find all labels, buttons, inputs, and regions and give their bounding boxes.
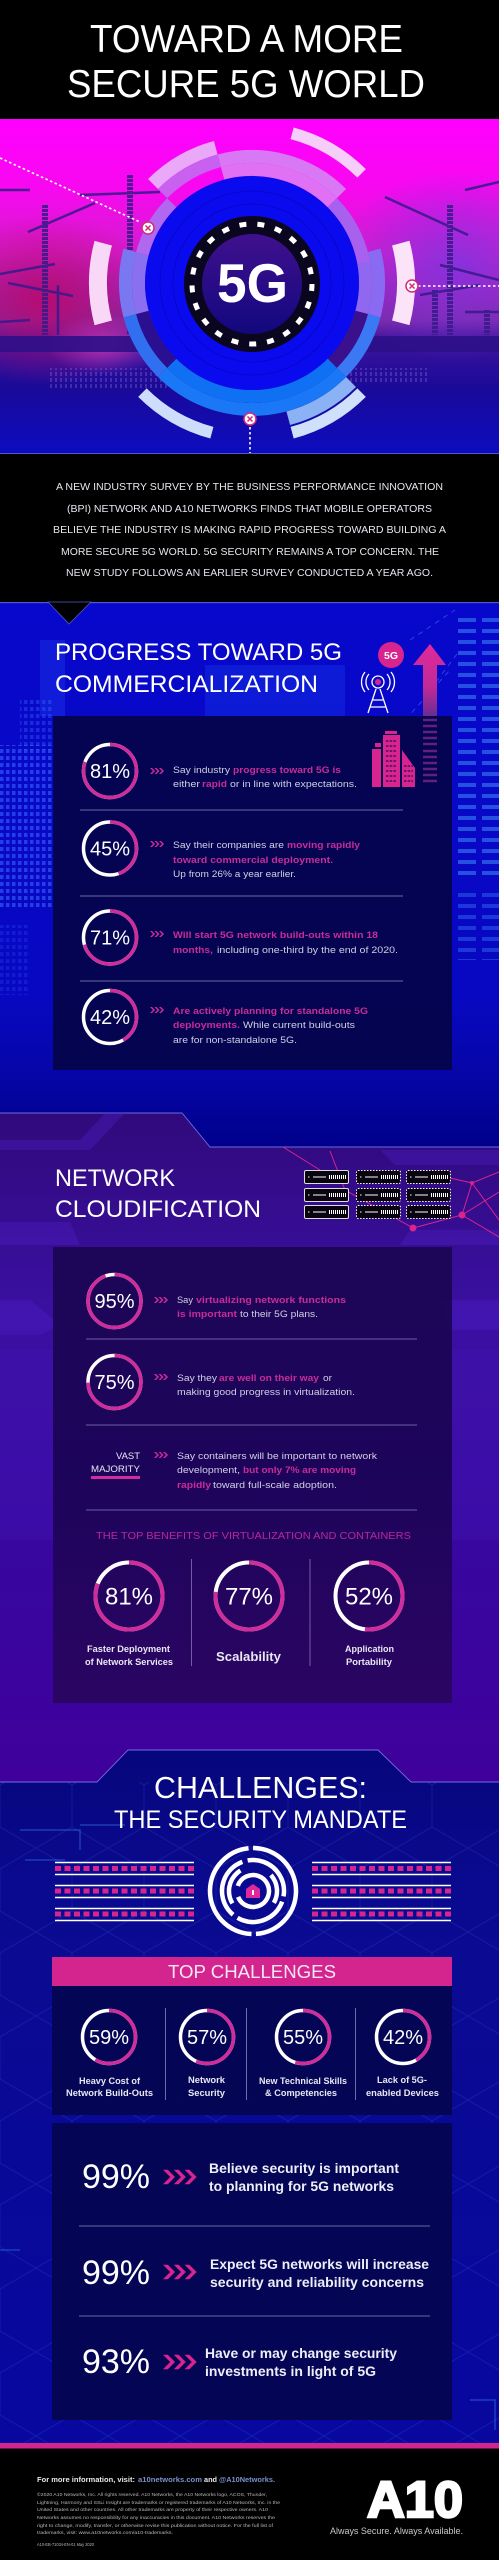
intro text band: BELIEVE THE INDUSTRY IS MAKING RAPID PROGRESS TOWARD BUILDING A: [53, 525, 446, 536]
stat row: 75%: 75%: [94, 1372, 135, 1394]
top challenges banner: TOP CHALLENGES: [168, 1961, 336, 1982]
benefit: 81% faster deployment: 81%: [105, 1584, 153, 1610]
hero panel: 5G construction scene: [0, 64, 499, 502]
stat row: 45%: [80, 810, 403, 880]
challenge: 42%: 42%: [383, 2027, 423, 2049]
legal text: right to change, modify, transfer, or otherwise revise this publication without notice. For the full list of: [37, 2523, 274, 2528]
title band: TOWARD A MORE: [90, 18, 403, 61]
tagline: Always Secure. Always Available.: [330, 2526, 463, 2537]
section heading: COMMERCIALIZATION: [55, 671, 318, 698]
stat row: 81%: [84, 744, 357, 798]
benefit: 52% application portability: Application: [345, 1644, 394, 1655]
benefits heading: THE TOP BENEFITS OF VIRTUALIZATION AND CONTAINERS: [96, 1530, 411, 1542]
stats panel: [53, 1247, 452, 1703]
challenge: 59%: Network Build-Outs: [66, 2088, 153, 2099]
icon: blocked node right: [406, 280, 418, 292]
stat: 99% increased concerns: security and reliability concerns: [210, 2275, 424, 2290]
stat: 99% security important: [82, 2158, 400, 2196]
stat row: 45%: moving rapidly: [287, 840, 361, 851]
intro text band: [0, 454, 499, 602]
stat: 99% increased concerns: 99%: [82, 2254, 150, 2292]
stat row: 81%: either: [173, 779, 201, 790]
title band: SECURE 5G WORLD: [67, 63, 425, 106]
stat row: 95%: virtualizing network functions: [196, 1295, 346, 1306]
legal text: ©2020 A10 Networks, Inc. All rights reserved. A10 Networks, the A10 Networks logo, ACOS, Thunder,: [37, 2491, 267, 2497]
section heading: [55, 1165, 261, 1223]
challenge: 55%: & Competencies: [265, 2088, 337, 2099]
hero dial: [33, 64, 471, 502]
challenge: 55%: New Technical Skills: [259, 2076, 347, 2087]
icon: blocked node bottom: [244, 413, 256, 425]
section heading: CLOUDIFICATION: [55, 1196, 261, 1223]
challenge: 42%: [356, 2008, 439, 2100]
stat row: vast majority: toward full-scale adoption.: [213, 1480, 337, 1491]
stat row: 81%: progress toward 5G is: [233, 765, 341, 776]
stat: 93% change investments: 93%: [82, 2343, 150, 2381]
5G label: 5G: [217, 252, 288, 314]
stat row: 75%: [86, 1339, 417, 1408]
stat row: 95%: is important: [177, 1309, 238, 1320]
cranes silhouettes: [0, 175, 499, 335]
footer: [0, 2443, 499, 2560]
challenge: 59%: 59%: [89, 2027, 129, 2049]
stat row: 75%: are well on their way: [219, 1373, 320, 1384]
challenge: 57%: [166, 2008, 234, 2100]
challenge: 55%: [246, 2008, 347, 2100]
more information line: @A10Networks.: [219, 2475, 275, 2484]
stat row: 71%: including one-third by the end of 2020.: [217, 945, 398, 956]
stat row: 42%: While current build-outs: [243, 1020, 355, 1031]
stat row: vast majority: but only 7% are moving: [243, 1465, 356, 1476]
more information line: and: [204, 2475, 217, 2484]
intro text band: NEW STUDY FOLLOWS AN EARLIER SURVEY CONDUCTED A YEAR AGO.: [66, 568, 433, 579]
stripes left: [55, 1862, 194, 1920]
icon: rising arrow: [413, 644, 446, 781]
title band: [0, 0, 499, 119]
benefit: 81% faster deployment: [85, 1562, 173, 1668]
stat row: 71%: months,: [173, 945, 213, 956]
benefit: 77% scalability: Scalability: [216, 1650, 281, 1664]
stat row: vast majority: Say containers will be important to network: [177, 1451, 377, 1462]
challenge: 55%: 55%: [283, 2027, 323, 2049]
stat row: vast majority: VAST: [116, 1451, 140, 1462]
stat row: 45%: 45%: [90, 838, 130, 860]
stat: 93% change investments: Have or may change security: [205, 2346, 397, 2361]
stat: 93% change investments: [79, 2316, 430, 2381]
stat row: 95%: to their 5G plans.: [240, 1309, 318, 1320]
network lines: [283, 1147, 499, 1237]
icon: blocked node left: [142, 222, 154, 234]
more information line: [37, 2475, 275, 2484]
stat row: vast majority: MAJORITY: [91, 1464, 141, 1475]
section: progress toward 5G commercialization: [0, 602, 499, 1150]
stat row: 95%: 95%: [94, 1291, 135, 1313]
stat: 99% increased concerns: Expect 5G networks will increase: [210, 2257, 430, 2272]
A10 logo: A10: [367, 2471, 463, 2528]
stat row: vast majority: rapidly: [177, 1480, 212, 1491]
challenge: 42%: Lack of 5G-: [377, 2075, 427, 2086]
stat row: 45%: toward commercial deployment.: [173, 855, 333, 866]
legal text: United States and other countries. All other trademarks are property of their respective owners. A10: [37, 2507, 269, 2512]
intro text band: A NEW INDUSTRY SURVEY BY THE BUSINESS PERFORMANCE INNOVATION: [56, 482, 443, 493]
stat: 99% increased concerns: [79, 2226, 430, 2292]
legal text: [37, 2491, 280, 2547]
benefit: 77% scalability: [192, 1559, 282, 1666]
challenge: 57%: 57%: [187, 2027, 227, 2049]
stat row: 81%: Say industry: [173, 765, 230, 776]
stat row: 71%: [80, 896, 403, 964]
stat row: 75%: Say they: [177, 1373, 217, 1384]
stats panel: [53, 716, 452, 1070]
icon: 5G badge: [378, 642, 404, 668]
icon: signal tower: [361, 672, 395, 713]
stat row: 71%: Will start 5G network build-outs within 18: [173, 930, 379, 941]
section heading: PROGRESS TOWARD 5G: [55, 639, 342, 666]
benefit: 52% application portability: Portability: [346, 1657, 393, 1668]
stat row: 42%: deployments.: [173, 1020, 240, 1031]
legal text: A10-EB-71034-EN-01 May 2020: [37, 2542, 94, 2547]
stat row: 45%: Say their companies are: [173, 840, 284, 851]
stat row: 42%: Are actively planning for standalone 5G: [173, 1006, 368, 1017]
dotted connectors: [0, 158, 499, 453]
intro text band: MORE SECURE 5G WORLD. 5G SECURITY REMAINS A TOP CONCERN. THE: [61, 547, 439, 558]
legal text: Networks assumes no responsibility for any inaccuracies in this document. A10 Networks reserves the: [37, 2515, 276, 2520]
stat row: 45%: Up from 26% a year earlier.: [173, 869, 296, 880]
more information line: For more information, visit:: [37, 2475, 135, 2484]
benefit: 81% faster deployment: of Network Services: [85, 1657, 173, 1668]
challenge: 57%: Security: [188, 2088, 226, 2099]
stat row: 95%: [88, 1274, 346, 1328]
stat row: 95%: Say: [177, 1295, 193, 1306]
icon: server racks: [304, 1170, 450, 1218]
benefit: 81% faster deployment: Faster Deployment: [87, 1644, 171, 1655]
section heading: [55, 639, 342, 698]
stat row: vast majority: development,: [177, 1465, 240, 1476]
section: network cloudification: [0, 1113, 499, 1790]
stat row: 71%: 71%: [90, 928, 130, 950]
icon: security maze: [209, 1847, 297, 1935]
security stats panel: [52, 2123, 452, 2420]
section heading: THE SECURITY MANDATE: [114, 1806, 407, 1834]
top challenges banner: [52, 1957, 452, 1986]
icon: city building: [372, 731, 415, 787]
stat row: 75%: or: [323, 1373, 333, 1384]
section heading: NETWORK: [55, 1165, 176, 1192]
section: challenges, the security mandate: [0, 1750, 499, 2444]
intro text band: (BPI) NETWORK AND A10 NETWORKS FINDS THAT MOBILE OPERATORS: [67, 504, 432, 515]
stat row: 42%: [80, 981, 403, 1046]
benefit: 52% application portability: 52%: [345, 1584, 393, 1610]
stat row: 81%: or in line with expectations.: [230, 779, 357, 790]
benefit: 52% application portability: [310, 1559, 402, 1668]
legal text: Lightning, Harmony and SSLi Insight are trademarks or registered trademarks of A10 Networks, Inc. in the: [37, 2500, 280, 2505]
stat row: 75%: making good progress in virtualization.: [177, 1387, 355, 1398]
stat row: 42%: are for non-standalone 5G.: [173, 1035, 297, 1046]
legal text: trademarks, visit: www.a10networks.com/a10-trademarks.: [37, 2530, 173, 2535]
stat: 99% security important: to planning for 5G networks: [209, 2179, 394, 2194]
stat: 93% change investments: investments in light of 5G: [205, 2364, 376, 2379]
stat row: 81%: rapid: [202, 779, 227, 790]
section heading: [114, 1770, 407, 1834]
stat: 99% security important: 99%: [82, 2158, 150, 2196]
challenge: 59%: [66, 2010, 153, 2099]
section heading: CHALLENGES:: [154, 1770, 367, 1805]
more information line: a10networks.com: [138, 2475, 202, 2484]
benefit: 77% scalability: 77%: [225, 1584, 273, 1610]
stat row: 42%: 42%: [90, 1007, 130, 1029]
stripes right: [312, 1862, 451, 1920]
challenge: 59%: Heavy Cost of: [79, 2076, 141, 2087]
stat row: vast majority: [86, 1425, 417, 1510]
stat row: 81%: 81%: [90, 761, 130, 783]
challenges panel: [52, 1986, 452, 2115]
challenge: 42%: enabled Devices: [366, 2088, 439, 2099]
icon: 5G badge: 5G: [384, 650, 398, 662]
stat: 99% security important: Believe security is important: [209, 2161, 400, 2176]
challenge: 57%: Network: [188, 2075, 226, 2086]
